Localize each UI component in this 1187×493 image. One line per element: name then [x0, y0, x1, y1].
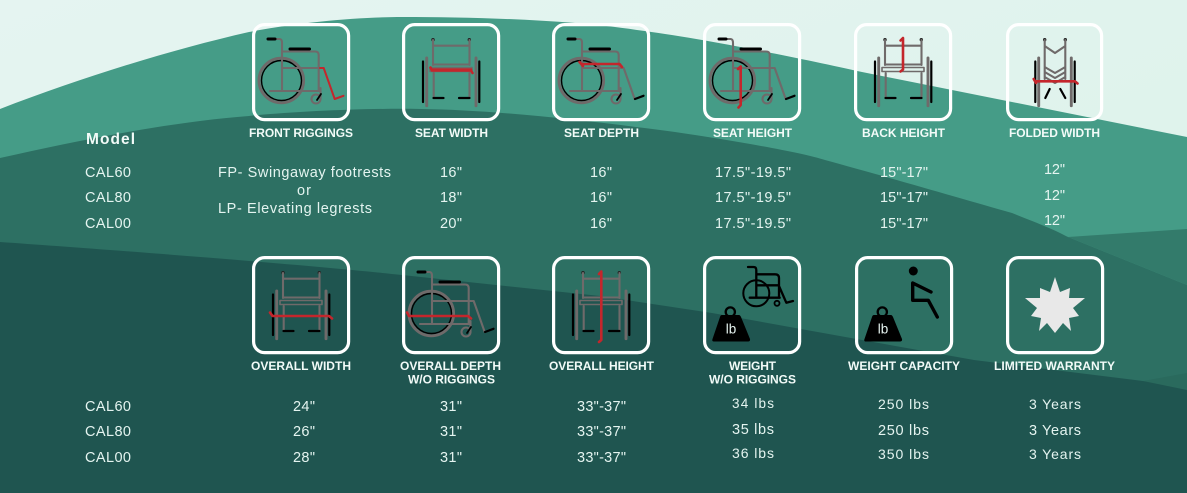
values: seat width: 18" [440, 190, 462, 206]
values: seat width [440, 165, 462, 232]
values: overall height: 33"-37" [577, 424, 626, 440]
values: folded width: 12" [1044, 188, 1065, 204]
panel: overall width [251, 258, 351, 373]
row labels: bottom table models: CAL00 [85, 450, 131, 466]
values: limited warranty: 3 Years [1029, 396, 1081, 412]
panel: weight capacity [848, 258, 960, 373]
values: back height: 15"-17" [880, 216, 928, 232]
row labels: bottom table models: CAL60 [85, 399, 131, 415]
values: front riggings: FP- Swingaway footrests [218, 165, 391, 181]
values: seat width: 20" [440, 216, 462, 232]
values: seat depth: 16" [590, 190, 612, 206]
values: overall height: 33"-37" [577, 450, 626, 466]
values: limited warranty [1029, 396, 1081, 462]
label: weight without riggings: WEIGHT [729, 359, 777, 373]
values: back height [880, 165, 928, 232]
values: seat depth: 16" [590, 165, 612, 181]
values: overall depth: 31" [440, 424, 462, 440]
icon: wheelchair side with overall depth marker [407, 272, 494, 336]
panel: front riggings [249, 25, 353, 140]
values: weight without riggings: 36 lbs [732, 445, 774, 461]
label: overall depth [400, 359, 501, 386]
values: seat height: 17.5"-19.5" [715, 216, 791, 232]
values: seat depth [590, 165, 612, 232]
values: folded width [1044, 162, 1065, 229]
panel: seat depth [554, 25, 649, 140]
panel: seat width [404, 25, 499, 140]
values: front riggings [218, 165, 391, 217]
values: seat height: 17.5"-19.5" [715, 190, 791, 206]
icon: warranty starburst [1025, 277, 1085, 333]
label: weight without riggings [709, 359, 796, 386]
values: weight without riggings: 35 lbs [732, 422, 774, 438]
heading: Model: Model [86, 131, 135, 148]
panel: overall height [549, 258, 655, 373]
label: back height: BACK HEIGHT [862, 126, 946, 140]
icon: weight and seated person [864, 266, 937, 342]
values: overall width [293, 399, 315, 466]
label: folded width: FOLDED WIDTH [1009, 126, 1100, 140]
icon: weight and wheelchair [712, 267, 793, 342]
values: weight capacity: 250 lbs [878, 423, 929, 439]
values: seat width: 16" [440, 165, 462, 181]
label: front riggings: FRONT RIGGINGS [249, 126, 353, 140]
values: overall width: 26" [293, 424, 315, 440]
panel: weight without riggings [705, 258, 800, 386]
values: weight capacity: 250 lbs [878, 396, 929, 412]
panel: folded width [1008, 25, 1102, 140]
values: back height: 15"-17" [880, 190, 928, 206]
values: limited warranty: 3 Years [1029, 423, 1081, 439]
icon: wheelchair front with overall height marker [573, 271, 629, 342]
values: overall depth: 31" [440, 450, 462, 466]
values: folded width: 12" [1044, 213, 1065, 229]
values: weight without riggings [732, 396, 774, 461]
label: overall depth: W/O RIGGINGS [408, 372, 495, 386]
values: overall height [577, 399, 626, 466]
icon: wheelchair front with back height marker [875, 38, 931, 106]
label: overall height: OVERALL HEIGHT [549, 359, 655, 373]
label: seat width: SEAT WIDTH [415, 126, 488, 140]
values: seat height: 17.5"-19.5" [715, 165, 791, 181]
values: seat depth: 16" [590, 216, 612, 232]
values: seat height [715, 165, 791, 232]
label: seat height: SEAT HEIGHT [713, 126, 793, 140]
values: overall width: 28" [293, 450, 315, 466]
row labels: bottom table models [85, 399, 131, 466]
icon: wheelchair front with seat width marker [423, 38, 479, 106]
values: folded width: 12" [1044, 162, 1065, 178]
icon: wheelchair side with seat height marker [710, 39, 794, 108]
values: limited warranty: 3 Years [1029, 446, 1081, 462]
values: overall height: 33"-37" [577, 399, 626, 415]
label: overall depth: OVERALL DEPTH [400, 359, 501, 373]
row labels: bottom table models: CAL80 [85, 424, 131, 440]
label: seat depth: SEAT DEPTH [564, 126, 639, 140]
row labels: top table models: CAL60 [85, 165, 131, 181]
values: weight without riggings: 34 lbs [732, 396, 774, 411]
icon: wheelchair front with overall width marker [270, 271, 332, 339]
panel: back height [856, 25, 951, 140]
row labels: top table models: CAL00 [85, 216, 131, 232]
panel: limited warranty [994, 258, 1115, 373]
values: overall depth: 31" [440, 399, 462, 415]
values: weight capacity [878, 396, 929, 462]
icon: folded wheelchair with width marker [1034, 38, 1078, 106]
values: overall depth [440, 399, 462, 466]
icon: wheelchair side with seat depth marker [559, 39, 644, 104]
row labels: top table models: CAL80 [85, 190, 131, 206]
values: weight capacity: 350 lbs [878, 446, 929, 462]
row labels: top table models [85, 165, 131, 232]
values: front riggings: LP- Elevating legrests [218, 201, 372, 217]
label: limited warranty: LIMITED WARRANTY [994, 359, 1115, 373]
label: weight without riggings: W/O RIGGINGS [709, 372, 796, 386]
values: back height: 15"-17" [880, 165, 928, 181]
label: overall width: OVERALL WIDTH [251, 359, 351, 373]
label: weight capacity: WEIGHT CAPACITY [848, 359, 960, 373]
icon: wheelchair side with red footrest [259, 39, 344, 104]
values: front riggings: or [297, 183, 311, 199]
values: overall width: 24" [293, 399, 315, 415]
panel: overall depth [400, 258, 501, 386]
panel: seat height [705, 25, 800, 140]
